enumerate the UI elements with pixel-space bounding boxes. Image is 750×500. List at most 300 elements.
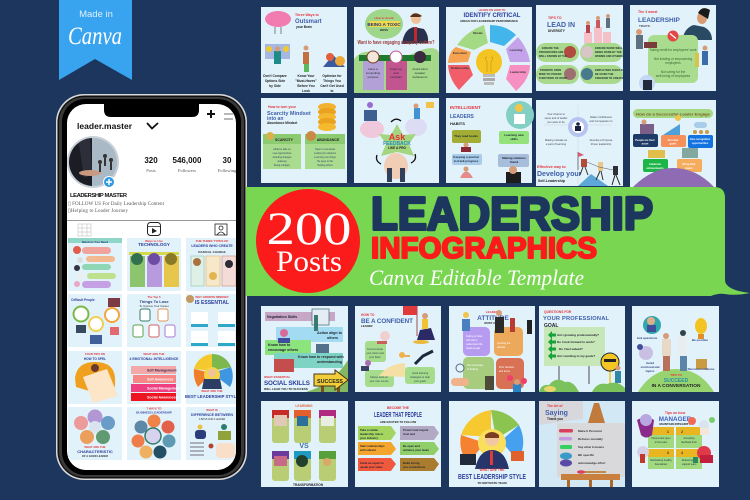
engagement boxes — [633, 134, 713, 172]
mini post: emotional intelligence: Social Management — [147, 386, 181, 390]
arrow tags: Build strong — [403, 461, 420, 465]
tip captions: Know Your — [297, 74, 315, 78]
tip grid: 1 — [667, 430, 669, 434]
attitude panels: and focus — [499, 370, 511, 373]
engagement boxes: Celebrate — [649, 162, 661, 166]
heading: WILL LEAD YOU TO SUCCESS — [264, 387, 308, 391]
tip labels: and Compassion to — [589, 119, 613, 123]
tip grid: Honest and open — [651, 437, 671, 440]
heading: into an — [267, 116, 283, 122]
tip pills: EMPLOYEES SHOULD — [595, 68, 623, 72]
heading: TO MOTIVATE TEAM — [477, 481, 507, 485]
column: scarcity: Avoiding changes — [273, 156, 292, 159]
tip grid: Accepting — [684, 437, 695, 440]
tip labels: Recommendations — [688, 367, 715, 371]
tip pills: PROCEDURES ARE — [539, 50, 564, 54]
message panel: BE specific — [578, 453, 595, 457]
post: art of saying thank you — [539, 401, 625, 487]
option columns: and — [393, 71, 399, 75]
heading: How to Avoid — [375, 16, 394, 20]
illustration: people — [451, 310, 532, 392]
heading: QUESTIONS FOR — [544, 310, 572, 314]
subheading: Want to have engaging company culture? — [358, 40, 434, 46]
attitude panels — [463, 327, 524, 389]
profile bio: LEADERSHIP MASTER — [70, 193, 128, 199]
tip labels: topics — [646, 369, 655, 373]
heading: YOUR PROFESSIONAL — [543, 316, 610, 322]
heading: HABITS — [450, 121, 465, 126]
mini post: mentors: Mentors You Need — [82, 240, 108, 244]
heading — [477, 310, 509, 325]
icon: light bulb — [476, 49, 502, 85]
illustration: people — [460, 142, 521, 183]
column: abundance: Looking for solutions — [314, 152, 337, 155]
heading pill: How do a Successful Leader Engage — [636, 112, 711, 116]
tip labels — [637, 336, 715, 373]
mini post: seven ways — [127, 406, 181, 460]
attitude panels: Ignoring the — [497, 342, 511, 345]
habit boxes: Learning new — [504, 133, 524, 137]
illustration: woman with flag — [403, 306, 435, 344]
subtitle: Canva Editable Template — [369, 265, 584, 290]
post: manager integrity — [632, 401, 719, 487]
tip labels — [544, 112, 613, 146]
heading — [374, 406, 422, 424]
heading — [537, 165, 582, 183]
heading — [652, 373, 701, 389]
illustration: people — [274, 309, 329, 372]
tip pills: BE GIVEN THE — [595, 72, 614, 76]
heading: Tips on how — [665, 411, 685, 415]
heading: MAINTAIN INTEGRITY — [659, 422, 691, 426]
heading: LEARN ON HOW TO — [479, 8, 506, 12]
heading: Scarcity Mindset — [267, 111, 311, 117]
profile bio: ▯ FOLLOW US For Daily Leadership Content — [68, 201, 165, 207]
post: identify critical areas — [446, 7, 532, 93]
tip captions: Can't Get Used — [320, 84, 344, 88]
mini post: three types: THE THREE TYPES OF — [196, 239, 229, 243]
engagement boxes: Give recognition — [690, 137, 711, 141]
arrow tags: Be open and — [403, 444, 420, 448]
option columns: Clean up — [390, 67, 402, 71]
mini post: say yes and no — [68, 351, 122, 404]
mini post: three types — [186, 238, 238, 291]
tip labels: Your chance to — [547, 112, 565, 116]
post: leader that people follow — [355, 401, 441, 487]
option columns: behaviours — [413, 75, 428, 79]
icon: tagged tab — [215, 224, 227, 235]
heading: LEARNING — [295, 404, 313, 408]
icon: reels tab — [148, 222, 160, 236]
message panel: Make it Personal — [578, 429, 602, 433]
wheel segments: Execution — [453, 51, 467, 55]
tip grid: 4 — [681, 451, 683, 455]
tip grid — [648, 427, 702, 469]
trait panel: Taking credit for employees' work — [649, 48, 697, 52]
tip captions — [263, 74, 344, 93]
option columns: speaker — [415, 71, 425, 75]
tip labels: Make mindfulness — [590, 115, 612, 119]
column: scarcity: Afraid to take on — [273, 148, 291, 151]
tip boxes: Good learning — [412, 371, 429, 375]
heading: Develop your — [537, 171, 582, 178]
banner shape — [246, 187, 750, 296]
heading: ARE EXCITED TO FOLLOW — [380, 420, 417, 424]
skill strips: Know how to respond with — [298, 355, 344, 359]
engagement boxes: goals — [670, 142, 677, 146]
heading: Ask — [389, 132, 406, 142]
heading: Self-Leadership — [538, 179, 566, 183]
mini post: technology — [127, 238, 181, 291]
attitude panels: Poor decision — [499, 366, 515, 369]
heading — [383, 132, 411, 150]
column: abundance — [305, 131, 345, 169]
attitude panels: with will to — [466, 339, 478, 342]
easel base — [561, 470, 620, 487]
skill strips: Negotiation Skills — [267, 315, 297, 319]
heading — [361, 313, 413, 328]
tip boxes: strategies to help — [410, 375, 430, 379]
option columns: purpose — [368, 75, 379, 79]
tip captions: Look — [302, 89, 310, 93]
mini post: characteristic: OF A GOOD LEADER — [82, 454, 108, 458]
post: scarcity mindset — [261, 98, 347, 183]
profile stats: 320 — [144, 156, 158, 165]
skill strips: others — [327, 336, 338, 340]
attitude panels: understand the — [466, 343, 483, 346]
heading: BE A CONFIDENT — [361, 318, 413, 325]
icon: grid tab — [78, 224, 91, 236]
heading: MANAGER — [659, 416, 692, 423]
wheel segments: Morale — [473, 31, 483, 35]
illustration: businessman — [402, 13, 428, 44]
mini post: emotional intelligence: Social Awareness — [147, 396, 177, 400]
heading: LEADERS — [486, 310, 500, 314]
tip captions: by Side — [269, 84, 281, 88]
option columns: compelling — [366, 71, 381, 75]
illustration: three tips — [265, 44, 345, 72]
post: three worst leadership traits — [630, 5, 716, 91]
arrow tags: trust and — [403, 432, 415, 436]
attitude panels: attitude — [497, 346, 506, 349]
tip boxes: your listen — [369, 355, 381, 359]
column: abundance: Learning new things — [314, 156, 336, 159]
profile stats: Following — [218, 168, 237, 173]
arrow tags: with vibrant — [359, 448, 376, 452]
mini post: boss vs leader: DIFFERENCE BETWEEN — [191, 413, 233, 417]
badge: 200 posts: Posts — [276, 245, 342, 278]
heading: How to turn your — [268, 105, 297, 109]
profile bio — [68, 193, 165, 214]
tip labels: Making mistake as — [545, 138, 568, 142]
heading — [543, 310, 610, 329]
heading: INTELLIGENT — [450, 105, 481, 110]
heading: IN A CONVERSATION — [652, 383, 701, 389]
illustration: central leader — [460, 429, 524, 469]
tip pills — [536, 43, 624, 84]
mini post: leadership style — [185, 351, 239, 404]
tip captions: Options Side — [265, 79, 285, 83]
heading — [264, 375, 310, 391]
mini post: leadership style: BEST LEADERSHIP STYLE — [185, 394, 239, 399]
mini post: essential: WHY GROWTH MINDSET — [195, 295, 229, 299]
message panel: Refocus mentally — [578, 437, 603, 441]
tip pills: BEING DONE BY THE — [595, 50, 622, 54]
mini post: three types: RADICAL CHANGE — [198, 250, 226, 254]
phone mockup — [56, 94, 247, 480]
habit boxes: They read books — [454, 134, 478, 138]
habit boxes — [452, 130, 529, 167]
arrow tags: Start relationships — [360, 444, 385, 448]
arrow tags: enhance your tasks — [403, 448, 430, 452]
post: toxic boss — [354, 7, 439, 93]
mini post: things to lose: The Top 5 — [148, 295, 161, 299]
option columns — [359, 51, 431, 90]
mini post: boss vs leader: WHAT IS — [206, 408, 218, 412]
tip labels: serve and of leader — [544, 116, 568, 120]
trait panel: well-being of employees — [656, 74, 691, 78]
heading: Abundance Mindset — [267, 121, 298, 125]
attitude panels: Not encourage — [467, 364, 484, 367]
heading: GOAL — [544, 323, 558, 329]
tip grid: Maintaining healthy — [650, 459, 673, 462]
heading: LEADER THAT PEOPLE — [374, 412, 422, 419]
illustration: teams — [640, 115, 709, 158]
illustration: podium — [584, 14, 611, 44]
arrow tags: speak your value — [360, 465, 383, 469]
option columns: Have a — [368, 67, 378, 71]
column: abundance: Open to new ideas — [315, 148, 336, 151]
mini post: technology: TECHNOLOGY — [138, 242, 170, 247]
illustration: climber — [361, 331, 433, 377]
engagement boxes: Set clear — [668, 138, 678, 142]
heading: your Brain — [296, 25, 312, 29]
habit boxes: skills — [510, 137, 518, 141]
icon: gear figure — [568, 117, 588, 137]
post: intelligent leaders habits — [446, 98, 534, 183]
mini post: characteristic: CHARACTERISTIC — [77, 449, 113, 454]
illustration: brain — [265, 11, 291, 34]
heading — [450, 105, 481, 126]
post: three ways to outsmart — [261, 7, 347, 93]
profile stats: 546,000 — [173, 156, 202, 165]
tip grid: support team — [682, 463, 696, 466]
vs: VS — [299, 443, 309, 450]
heading: ATTITUDE — [477, 315, 509, 322]
message panel — [557, 423, 625, 477]
mini post: difficult people — [68, 294, 122, 347]
icon: star badge — [379, 124, 416, 156]
skill strips: Action align to — [317, 331, 343, 335]
badge: 200 posts: 200 — [266, 203, 352, 255]
heading — [295, 13, 322, 29]
mini post: seven ways: 7 WAYS TO — [147, 406, 162, 410]
trait panel: Not trusting or empowering — [654, 57, 692, 61]
easel top — [588, 403, 605, 423]
mini post: boss vs leader — [186, 407, 238, 460]
heading: Thank you — [547, 417, 563, 421]
post: develop self-leadership — [536, 100, 623, 186]
mini post: things to lose: Things To Lose — [139, 299, 169, 304]
illustration: workers — [360, 102, 434, 182]
transformation cards — [272, 451, 336, 481]
post: social skills — [261, 306, 348, 392]
post: learning vs transformation — [261, 401, 348, 487]
tip grid: to the team — [655, 441, 667, 444]
grass — [539, 380, 625, 392]
title: infographics: INFOGRAPHICS — [371, 232, 597, 265]
tip pills: FUNCTIONS OF WORK — [539, 76, 568, 80]
heading — [458, 468, 526, 485]
post: attitude to avoid — [449, 306, 535, 392]
habit boxes: friend — [510, 160, 518, 164]
heading: TRAITS — [639, 24, 650, 28]
mini post: characteristic: WHAT ARE THE — [84, 445, 106, 449]
illustration: people — [636, 29, 708, 91]
post: best leadership style — [449, 401, 535, 487]
profile stats: Posts — [146, 168, 156, 173]
post: successful leader engage — [630, 100, 716, 187]
heading: WHAT ESSENTIAL — [264, 375, 291, 379]
icon: coin stack — [318, 103, 336, 131]
tip pills: WOMEN AND OTHERS — [595, 54, 623, 58]
arrow tags: Invite an expert to — [360, 461, 384, 465]
tip boxes: your own course — [369, 379, 389, 383]
attitude panels: Failing to listen — [466, 335, 483, 338]
ribbon: Made in Canva: Canva — [68, 23, 122, 50]
tip labels: a part of learning — [546, 142, 567, 146]
tip boxes: Always work on — [370, 375, 389, 379]
icon: add post — [207, 110, 215, 118]
mini post: seven ways: BUSINESS LEADERSHIP — [136, 410, 172, 414]
tip labels: Develop a Purpose — [590, 138, 613, 142]
mini post: three types: LEADERS WHO CREATE — [191, 244, 233, 248]
mini post: mentors — [68, 238, 122, 291]
heading: BECOME THE — [387, 406, 410, 410]
question panel: Do I feel valued? — [559, 347, 583, 351]
column: scarcity — [263, 132, 301, 169]
profile bio: ▯Helping to Leader Journey — [68, 208, 128, 214]
icon: menu — [224, 114, 233, 119]
arrow tags: Protect and inspire — [403, 428, 429, 432]
tip boxes — [365, 341, 435, 387]
post: professional goal — [539, 306, 625, 392]
mini post: difficult people: Difficult People — [71, 298, 95, 302]
heading: HOW TO — [361, 313, 375, 317]
heading: Outsmart — [295, 19, 322, 25]
mini post: things to lose: To Improve Your Career — [139, 304, 169, 308]
title: leadership: LEADERSHIP — [371, 188, 653, 240]
engagement boxes: People are their — [635, 138, 655, 142]
mini post: emotional intelligence: 4 EMOTIONAL INTELLIGENCE — [130, 357, 179, 361]
tip grid: Delivering on — [682, 459, 697, 462]
tip boxes: Communicate — [367, 347, 384, 351]
mini post: emotional intelligence: WHAT ARE THE — [143, 352, 165, 356]
wheel segments: Learning — [510, 48, 522, 52]
purple hill — [633, 168, 714, 187]
column: scarcity: SCARCITY — [275, 138, 294, 142]
tip pills: PROMOTE OPEN — [540, 68, 561, 72]
column: abundance: Helping others — [317, 164, 334, 167]
profile stats — [144, 156, 237, 173]
mini post: characteristic — [68, 407, 122, 460]
heading: The Art of — [547, 404, 563, 408]
heading — [460, 8, 521, 23]
heading: SOCIAL SKILLS — [264, 380, 310, 387]
skill strips — [265, 312, 344, 368]
tip captions: Things You — [323, 79, 341, 83]
illustration: yellow sign and person — [601, 353, 621, 392]
tip labels: Ask questions — [637, 336, 658, 340]
heading: Effective way to — [537, 165, 566, 169]
tip grid: feedback from — [681, 441, 697, 444]
tip captions: Before You — [297, 84, 315, 88]
option columns: Avoid silent — [412, 67, 428, 71]
trait panel: Not caring for the — [661, 70, 685, 74]
profile stats: 30 — [223, 156, 232, 165]
question panel: Do I look forward to work? — [557, 340, 595, 344]
heading — [547, 16, 575, 33]
heading: TIPS TO — [548, 16, 562, 20]
heading: FEEDBACK — [383, 141, 411, 147]
heading: The 3 worst — [638, 10, 658, 14]
option columns: overhaul — [390, 75, 402, 79]
habit boxes: Making relations — [502, 156, 526, 160]
mini post: essential: IS ESSENTIAL — [195, 300, 229, 306]
arrow tags: your industry — [360, 436, 378, 440]
post: lead in diversity — [536, 5, 624, 91]
mini post: say yes and no: HOW TO SPEL — [84, 357, 106, 361]
question panel — [544, 327, 605, 366]
tip captions: "Must-Haves" — [295, 79, 317, 83]
heading: BEING A TOXIC — [367, 22, 401, 27]
ribbon: Made in Canva — [59, 0, 132, 80]
message panel: Say what it means — [578, 445, 604, 449]
wheel segments: Relationship — [451, 66, 469, 70]
attitude panels: or helping — [467, 368, 479, 371]
tip grid: 3 — [667, 451, 669, 455]
heading: WHAT ARE THE — [480, 468, 505, 472]
heading: BEST LEADERSHIP STYLE — [458, 472, 526, 481]
tip labels: driven leadership — [591, 142, 612, 146]
engagement boxes: Bring their — [682, 162, 696, 166]
heading: LEADERS — [450, 114, 475, 120]
heading: LEADERSHIP — [638, 17, 681, 24]
tip grid: 2 — [681, 430, 683, 434]
mini post: emotional intelligence — [127, 351, 181, 404]
column: scarcity: Jealousy — [277, 160, 288, 163]
engagement boxes: teams — [685, 166, 693, 170]
tip labels: you want to be — [547, 120, 565, 124]
mini post: emotional intelligence: Self Management — [147, 368, 177, 372]
tip grid: boundaries — [655, 463, 668, 466]
heading — [545, 404, 568, 421]
arrow tags: Take a visible — [360, 428, 378, 432]
tip pills: WELL KNOWN BY THE — [539, 54, 568, 58]
illustration: angry boss — [682, 8, 712, 40]
tip captions: Optimize for — [322, 74, 342, 78]
heading — [638, 10, 681, 28]
heading: SUCCEED — [664, 378, 689, 384]
heading — [659, 411, 692, 426]
message panel: acknowledge effort — [578, 461, 605, 465]
heading — [267, 105, 311, 125]
mini post: essential — [186, 294, 238, 347]
wheel — [460, 410, 523, 463]
habit boxes: to track progress — [454, 159, 479, 163]
heading: BOSS — [380, 28, 388, 32]
tip boxes: your goals — [414, 379, 427, 383]
